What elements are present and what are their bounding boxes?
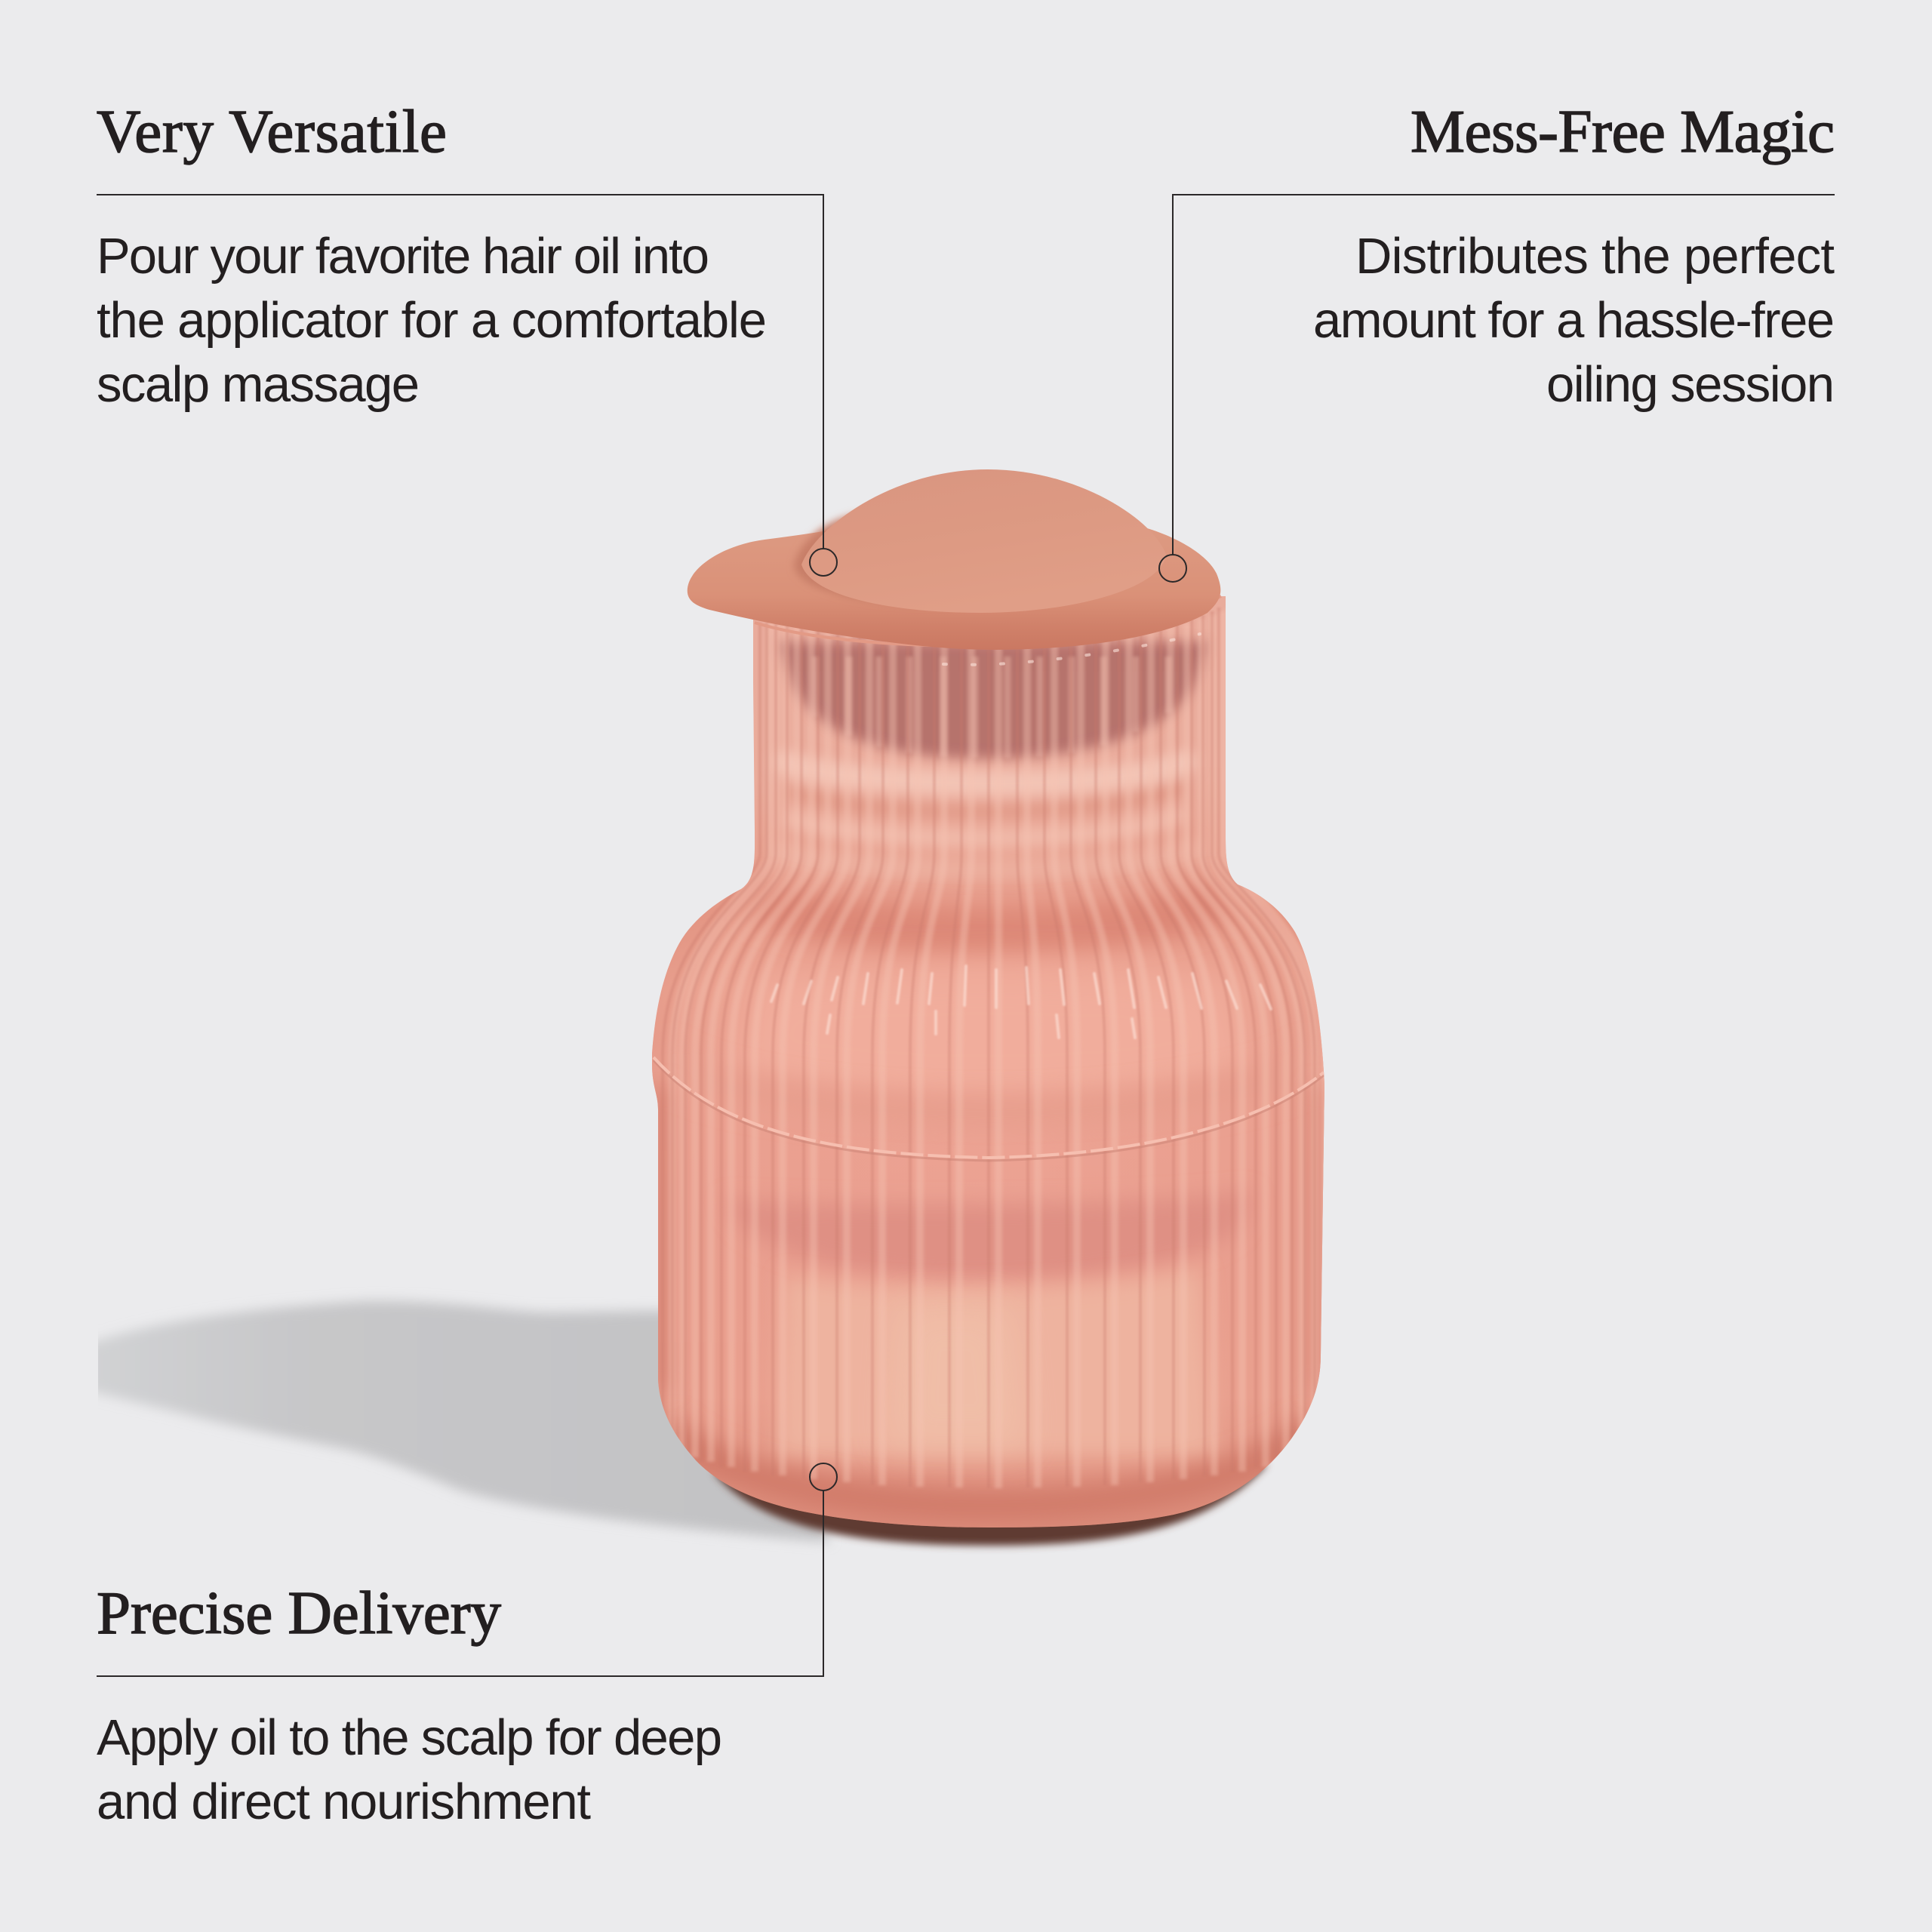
brim xyxy=(688,528,1220,650)
upper body lower band xyxy=(925,1103,1062,1111)
leader line xyxy=(97,195,823,549)
cast shadow xyxy=(68,1301,830,1542)
description: the applicator for a comfortable xyxy=(97,292,767,349)
callout: Mess-Free Magic xyxy=(1159,97,1835,582)
description: oiling session xyxy=(1546,356,1835,413)
cap rim seam xyxy=(755,596,1221,645)
interior dark ring xyxy=(738,1196,1239,1280)
neck: pale bands xyxy=(785,762,1192,869)
seam xyxy=(654,1057,1324,1161)
neck: light stripes over dark band xyxy=(815,657,1168,758)
product: applicator cap xyxy=(688,469,1220,650)
heading: Precise Delivery xyxy=(97,1579,501,1647)
leader line xyxy=(1173,195,1835,555)
upper body glow xyxy=(759,987,1229,1081)
description xyxy=(1313,228,1835,413)
neck: dark inner band xyxy=(777,641,1208,758)
heading: Very Versatile xyxy=(97,97,447,165)
shoulder speculars xyxy=(771,966,1271,1038)
rib tip dots xyxy=(943,634,1200,665)
neck base band xyxy=(755,898,1223,932)
dome xyxy=(801,469,1166,613)
bottle base colour xyxy=(641,589,1336,1540)
description: Pour your favorite hair oil into xyxy=(97,228,709,285)
marker xyxy=(1159,555,1186,582)
heading: Mess-Free Magic xyxy=(1411,97,1835,165)
description: Apply oil to the scalp for deep xyxy=(97,1709,722,1766)
contact shadow xyxy=(713,1464,1268,1546)
product: ribbed bottle xyxy=(641,589,1336,1540)
description: scalp massage xyxy=(97,356,420,413)
description xyxy=(97,228,767,413)
description: and direct nourishment xyxy=(97,1774,591,1830)
dome shadow xyxy=(794,513,981,605)
description xyxy=(97,1709,722,1830)
edge shading xyxy=(655,1088,669,1386)
vertical rib shadows xyxy=(663,608,1315,1488)
marker xyxy=(810,549,837,576)
callout: Very Versatile xyxy=(97,97,837,576)
callout: Precise Delivery xyxy=(97,1463,837,1830)
base tint xyxy=(664,1426,1313,1506)
description: Distributes the perfect xyxy=(1355,228,1835,285)
vertical rib highlights xyxy=(672,608,1324,1488)
leader line xyxy=(97,1491,823,1676)
marker xyxy=(810,1463,837,1491)
interior pale core xyxy=(777,1268,1215,1457)
description: amount for a hassle-free xyxy=(1313,292,1835,349)
